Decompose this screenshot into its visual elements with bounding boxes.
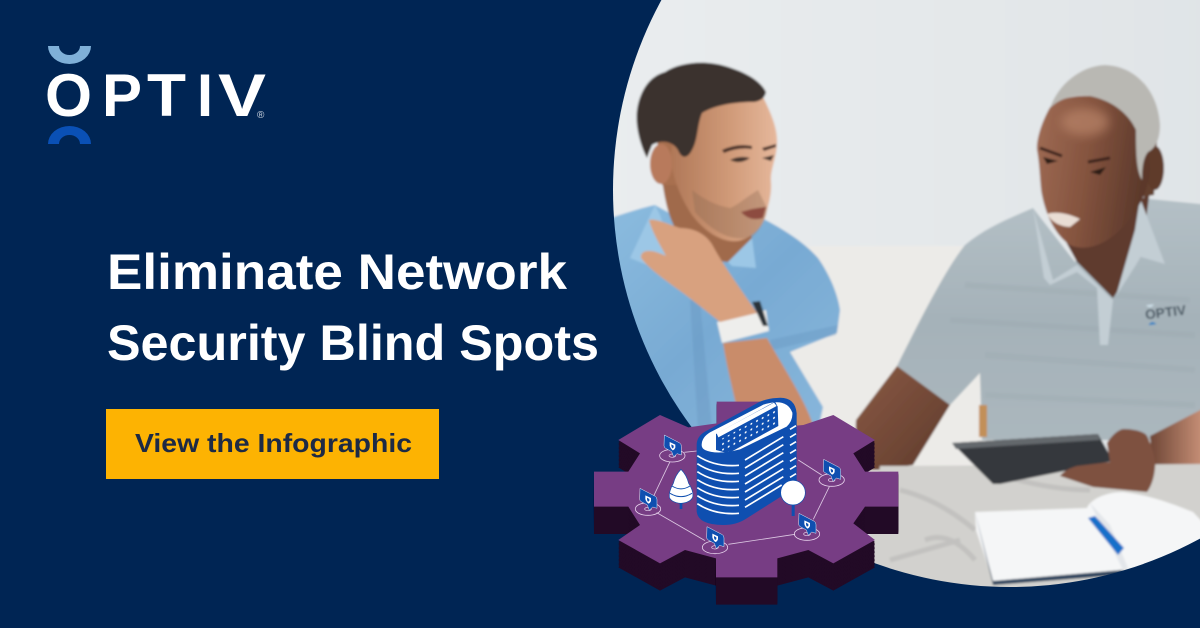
man right: neck <box>1065 190 1150 298</box>
man right: left arm <box>856 366 950 470</box>
man right: skull <box>1142 142 1158 198</box>
man right: far arm <box>1148 409 1200 466</box>
notebook <box>975 492 1200 581</box>
logo: wordmark: O <box>45 62 92 129</box>
gear extrusion <box>594 404 898 605</box>
pen <box>1088 516 1124 555</box>
logo: wordmark: V <box>218 62 266 129</box>
man left: hair <box>637 63 766 158</box>
logo: wordmark <box>45 62 266 129</box>
man right: shirt stripes <box>950 285 1195 405</box>
logo: wordmark: T <box>147 62 186 129</box>
sofa <box>958 383 980 441</box>
illustration: purple gear with building <box>594 398 898 605</box>
node icon 5 <box>819 459 844 486</box>
node icon 2 <box>635 488 661 515</box>
man left: ear <box>650 144 672 184</box>
button: view the infographic <box>106 409 439 479</box>
building stripes right <box>745 426 796 507</box>
tablet <box>952 434 1113 484</box>
man left: shirt <box>614 204 841 427</box>
man left: forearm <box>722 336 813 426</box>
wall <box>613 0 1200 537</box>
heading: Eliminate Network <box>107 244 567 300</box>
node icon 1 <box>660 435 685 462</box>
node icon 3 <box>702 527 728 554</box>
building roof <box>702 402 792 453</box>
logo: wordmark: P <box>102 62 142 129</box>
man left: face <box>671 97 777 241</box>
man right: face <box>1037 96 1150 248</box>
man left: shirt shading <box>690 300 838 430</box>
man left: neck <box>662 180 752 262</box>
heading <box>107 244 599 371</box>
network lines <box>653 451 829 544</box>
man right: chair <box>979 405 987 437</box>
man left: skull <box>656 140 676 186</box>
table <box>869 462 1200 587</box>
logo: registered mark: ® <box>257 110 265 121</box>
logo: wordmark: I <box>197 62 213 129</box>
building <box>697 398 797 525</box>
man left: hand <box>641 220 757 322</box>
round tree <box>781 480 805 516</box>
logo: OPTIV <box>45 46 266 144</box>
building inset <box>716 402 778 453</box>
tree <box>669 469 693 509</box>
man right: hair <box>1050 65 1160 180</box>
man right: shirt logo: OPTIV <box>1144 302 1187 322</box>
heading: Security Blind Spots <box>107 315 599 371</box>
man left: collar <box>630 205 756 268</box>
node icon 4 <box>794 513 820 540</box>
gear top face <box>594 402 898 577</box>
logo: lower arc <box>48 126 91 144</box>
man right: forehead highlight <box>1061 108 1109 136</box>
man right: ear <box>1152 146 1166 192</box>
building stripes left <box>697 456 739 514</box>
logo: upper arc <box>48 46 91 64</box>
man left: watch <box>717 310 769 343</box>
man right: hand <box>1060 429 1155 492</box>
man right: shirt <box>897 198 1200 440</box>
button: view the infographic: View the Infographic <box>135 428 412 458</box>
photo: two men talking <box>613 0 1200 587</box>
man right: collar <box>1033 198 1165 345</box>
network nodes <box>635 435 844 554</box>
